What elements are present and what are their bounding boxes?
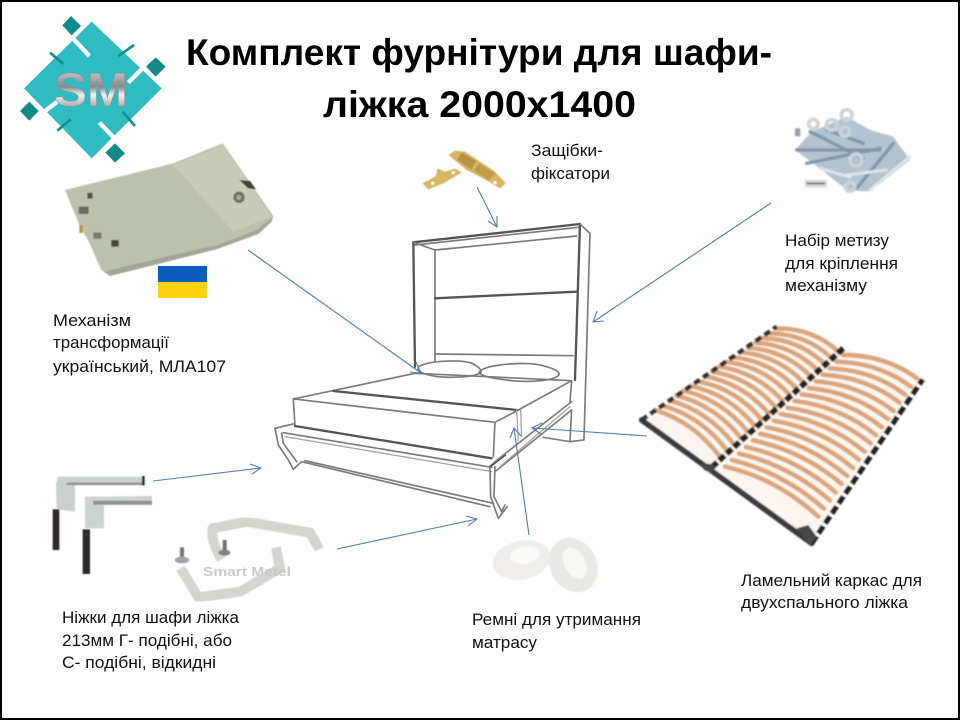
photo: latches	[423, 151, 506, 189]
arrow: C legs to bed	[337, 516, 477, 549]
text: latches label: Защібки-	[531, 142, 603, 160]
text: hardware label: механізму	[785, 277, 868, 295]
photo: L-shaped legs	[53, 476, 152, 574]
arrow: straps to bed	[510, 428, 529, 535]
arrow: hardware to bed	[593, 203, 771, 322]
text: mechanism label	[53, 312, 226, 376]
text: hardware label: Набір метизу	[785, 232, 890, 250]
logo: SM: SM	[54, 63, 128, 116]
text: hardware label: для кріплення	[785, 255, 898, 273]
icon: Ukrainian flag	[158, 266, 207, 298]
text: latches label	[531, 142, 610, 183]
text: straps label	[472, 611, 641, 652]
text: latches label: фіксатори	[531, 165, 610, 183]
text: mechanism label: український, МЛА107	[53, 358, 226, 376]
text: legs label: Ніжки для шафи ліжка	[62, 609, 240, 627]
photo: hardware set	[795, 110, 910, 192]
arrow: latches to bed	[477, 187, 497, 227]
text: hardware label	[785, 232, 898, 295]
arrow: frame to bed	[532, 423, 647, 436]
text: straps label: Ремні для утримання	[472, 611, 641, 629]
photo: slatted frame	[642, 325, 923, 545]
drawing: wall bed sketch	[275, 224, 590, 518]
title	[186, 32, 772, 125]
text: slatted frame label	[741, 572, 922, 612]
text: straps label: матрасу	[472, 634, 538, 652]
text: legs label: С- подібні, відкидні	[62, 654, 216, 672]
arrow: L legs to bed	[153, 464, 261, 481]
text: mechanism label: Механізм	[53, 312, 131, 330]
logo: SM	[20, 16, 166, 163]
photo: transformation mechanism	[65, 143, 273, 276]
text: legs label: 213мм Г- подібні, або	[62, 632, 232, 650]
text: mechanism label: трансформації	[53, 334, 169, 352]
text: legs label	[62, 609, 240, 672]
title: ліжка 2000х1400	[323, 84, 636, 125]
watermark: Smart Metel: Smart Metel	[203, 564, 291, 579]
photo: mattress straps	[489, 529, 607, 601]
photo: C-shaped legs	[175, 522, 319, 597]
arrow: mechanism to bed	[248, 250, 421, 373]
text: slatted frame label: Ламельний каркас для	[741, 572, 922, 590]
text: slatted frame label: двухспального ліжка	[741, 594, 909, 612]
title: Комплект фурнітури для шафи-	[186, 32, 772, 73]
